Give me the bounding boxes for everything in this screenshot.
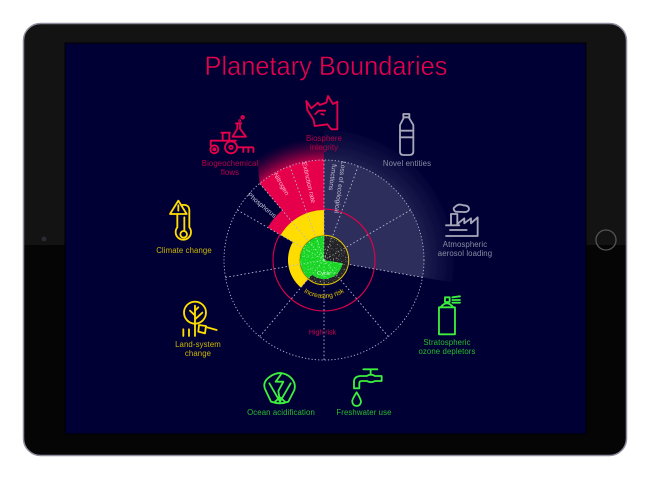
category: freshwater use [336,369,392,417]
label: biosphere integrity: Biosphere [306,134,342,143]
green safe zone [300,236,343,279]
icon: shell [264,373,295,403]
icon: spray can [439,296,460,334]
outer dashed ring [224,160,424,360]
category: climate change [156,201,212,255]
label: loss of ecological functions: functions [327,164,337,191]
icon: factory [446,205,478,236]
label: ocean acidification: Ocean acidification [247,408,315,417]
high-risk boundary ring [273,209,375,311]
label: land-system change: change [185,349,211,358]
label: atmospheric aerosol loading: Atmospheric [443,240,487,249]
wedge: phosphorus [268,210,324,260]
label: land-system change [175,340,221,358]
label: stratospheric ozone depletors: Stratospheric [423,338,471,347]
icon: rhino [306,96,337,129]
label: land-system change: Land-system [175,340,221,349]
spokes [226,160,422,360]
label: high risk: High risk [309,330,337,336]
category: stratospheric ozone depletors [419,296,475,356]
category: atmospheric aerosol loading [438,205,492,258]
label: biosphere integrity [306,134,342,152]
wedge: biosphere and nitrogen glow [257,138,324,260]
label: novel entities: Novel entities [383,159,431,168]
centre earth [298,234,350,286]
label: phosphorus: Phosphorus [246,192,278,220]
boundary chart [224,136,448,360]
icon: home button [596,230,616,250]
category: ocean acidification [247,373,315,417]
label: biosphere integrity: integrity [310,143,338,152]
earth speckles [300,236,348,284]
label: atmospheric aerosol loading [438,240,492,258]
label: increasing risk: Increasing risk [304,288,344,299]
wedge: grey unknown zone [324,160,424,277]
category: novel entities [383,114,431,168]
icon: tree and axe [183,302,217,336]
icon: warning thermometer [170,201,191,240]
label: cycle: Cycle [317,271,331,277]
screen background [65,43,586,434]
icon: tractor [210,116,254,153]
category: biogeochemical flows [202,116,258,177]
label: loss of ecological functions: Loss of ecological [332,161,347,214]
earth rays [300,236,345,284]
label: biogeochemical flows: flows [221,168,239,177]
title: Planetary Boundaries [204,51,448,81]
label: freshwater use: Freshwater use [336,408,392,417]
category: biosphere integrity [306,96,342,152]
wedge: yellow increasing-risk zone [281,210,324,288]
icon: bottle [400,114,413,155]
label: stratospheric ozone depletors [419,338,475,356]
wedge: novel entities and aerosol glow [324,126,458,283]
icon: tap [352,369,382,406]
label: nitrogen: Nitrogen [272,172,290,197]
label: atmospheric aerosol loading: aerosol loading [438,249,492,258]
category: land-system change [175,302,221,358]
label: biogeochemical flows: Biogeochemical [202,159,258,168]
label: stratospheric ozone depletors: ozone depletors [419,347,475,356]
label: extinction rate: Extinction rate [300,162,316,204]
label: biogeochemical flows [202,159,258,177]
wedge: red high-risk zone [260,160,324,260]
label: climate change: Climate change [156,246,212,255]
